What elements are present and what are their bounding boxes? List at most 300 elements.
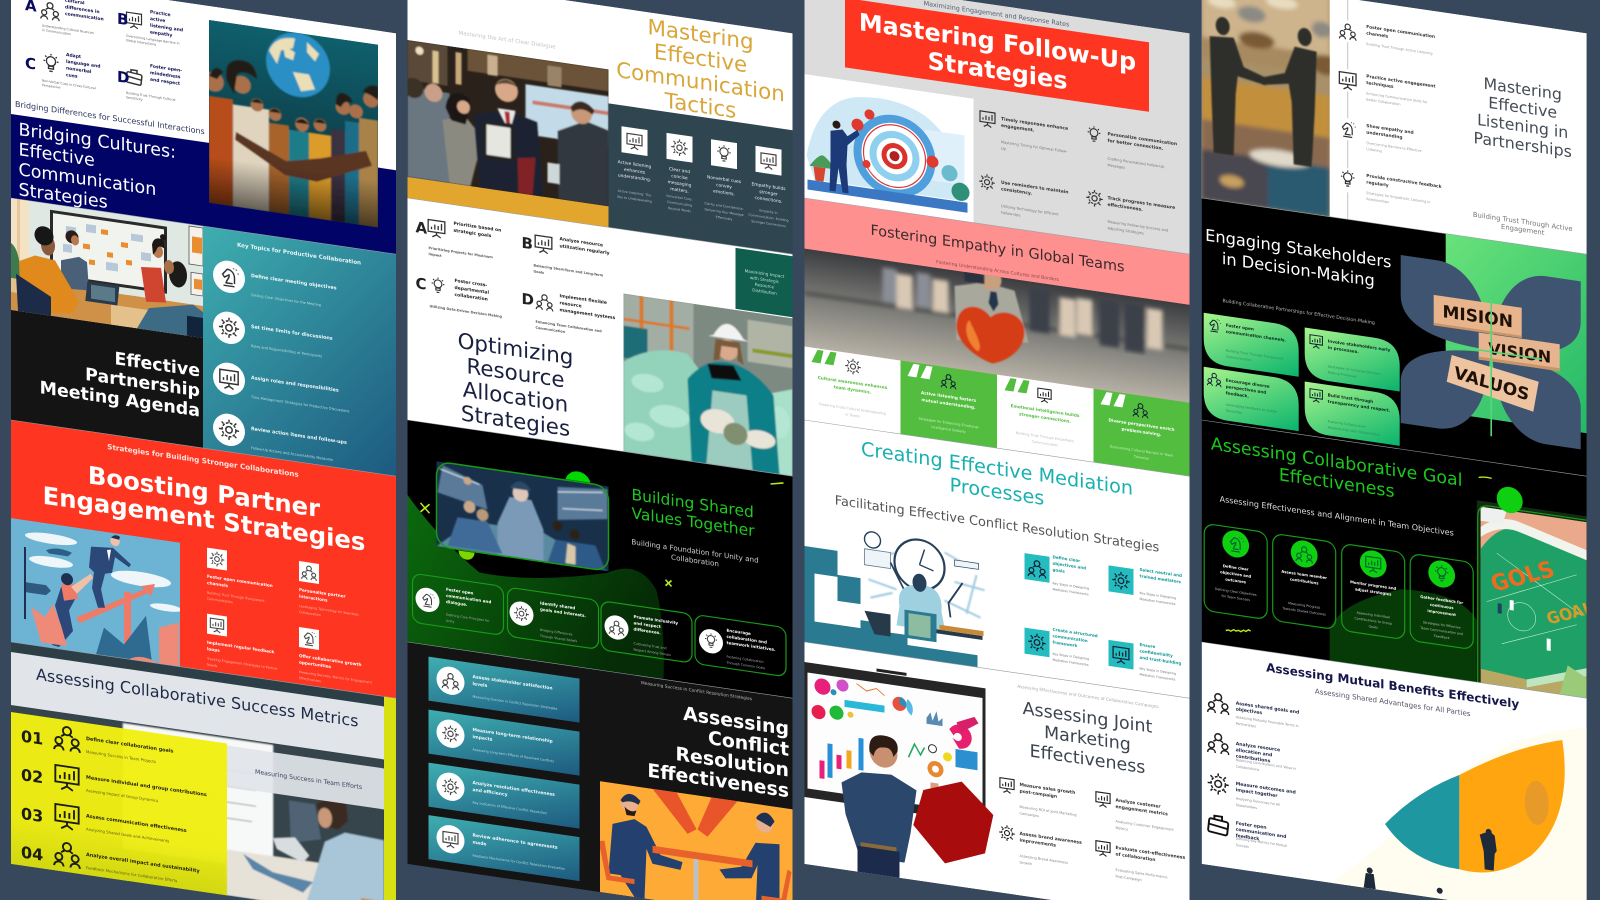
item headings: Track progress to measure [1108, 196, 1175, 211]
card captions: Outcomes [1226, 409, 1243, 415]
card captions: Strategies for Enhancing Emotional [919, 417, 978, 429]
item captions: Global Interactions [126, 38, 156, 47]
tactic captions: Communication: Building [748, 213, 789, 223]
item captions: Communication [536, 326, 566, 334]
panel: key topics [203, 226, 396, 476]
item letters: A [416, 218, 427, 238]
item captions: Mediation Frameworks [1052, 658, 1089, 667]
topic captions: Roles and Responsibilities of Participants [251, 344, 322, 358]
subtitle: Maximizing Engagement and Response Rates [924, 0, 1070, 29]
item headings: collaboration [454, 292, 488, 303]
item captions: Follow-Ups [1001, 211, 1020, 218]
card icons [1207, 318, 1322, 403]
item headings: trained mediators [1139, 573, 1182, 584]
item captions: Measuring ROI of Joint Marketing [1020, 805, 1077, 817]
card headings: dialogue. [446, 599, 468, 607]
item captions [1001, 140, 1168, 239]
card captions: Making Processes [1328, 370, 1357, 379]
tactic captions: Communicating [667, 200, 692, 208]
timeline captions: Enhancing Communication Skills for [1366, 92, 1427, 104]
item headings: contributions [1236, 753, 1271, 764]
slide: effective listening [1202, 0, 1587, 255]
tactic headings: connections. [755, 195, 782, 205]
card headings: Foster open [1226, 323, 1254, 332]
item letters: B [521, 234, 533, 253]
item captions: Messages [1107, 163, 1125, 170]
item captions: Analyzing Customer Engagement [1116, 819, 1174, 832]
step numbers: 04 [21, 843, 43, 865]
title: Boosting Partner [88, 460, 320, 523]
card headings: Cultural awareness enhances [818, 375, 887, 390]
item captions: Balancing Short-Term and Long-Term [534, 263, 603, 278]
item headings: Assess shared goals and [1236, 701, 1299, 716]
title: Partnership [85, 365, 200, 402]
step captions: Feedback Mechanisms for Collaborative Efforts [86, 865, 177, 883]
slide: follow-up strategies [804, 0, 1190, 254]
tactic captions: Active Listening: The [618, 189, 651, 198]
subtitle: Measuring Success in Conflict Resolution Strategies [641, 680, 753, 702]
card icons [845, 358, 1148, 418]
goal captions: Towards Shared Outcomes [1281, 606, 1326, 617]
slide: conflict resolution effectiveness [408, 642, 792, 900]
item headings: departmental [454, 285, 489, 296]
card captions: Cultivating Trust and [634, 642, 667, 650]
item headings: Analyze customer [1116, 798, 1161, 810]
title: Processes [950, 473, 1044, 510]
subtitle: Building Collaborative Partnerships for Effective Decision-Making [1223, 298, 1375, 326]
card headings: and respect [634, 620, 661, 629]
tactic headings: Clear and [669, 167, 690, 175]
timeline captions [1366, 42, 1432, 211]
wooden block: mission: MISION [1442, 302, 1513, 332]
metric headings: Review adherence to agreements [472, 834, 558, 851]
teal stepped blocks [804, 546, 978, 667]
card headings [1226, 323, 1391, 419]
accent: marks [420, 430, 784, 603]
step headings: Measure individual and group contributions [86, 775, 207, 798]
title: Mastering [647, 15, 754, 55]
card captions: Relationships with Stakeholders [1328, 425, 1380, 437]
slide: mediation processes [804, 420, 1190, 698]
tactic captions: Nonverbal Cues: [666, 194, 693, 202]
card headings: stronger connections. [1019, 411, 1071, 424]
slide: collaborative success metrics [11, 642, 396, 900]
timeline captions: Listening [1366, 147, 1382, 153]
item headings: confidentiality [1139, 648, 1173, 658]
metric headings: Analyze resolution effectiveness [472, 781, 555, 798]
title: Resolution [676, 743, 789, 782]
title: Building Shared [632, 486, 754, 522]
title: Bridging Cultures: [18, 120, 176, 163]
red hexagon [913, 775, 993, 870]
title: Assessing [683, 703, 789, 740]
item headings [207, 574, 362, 674]
goal headings [1220, 560, 1463, 618]
card captions [819, 402, 1174, 464]
timeline icons [1337, 19, 1359, 194]
item icon tiles [1024, 553, 1134, 670]
item captions: Metrics [1116, 826, 1128, 832]
item headings: nonverbal [66, 65, 92, 75]
title: Assessing Joint [1023, 699, 1152, 738]
item captions: Collaborations [1236, 764, 1260, 772]
title: Values Together [632, 504, 755, 540]
item headings: language and [66, 59, 100, 70]
title: Engagement Strategies [43, 481, 365, 557]
tactic captions: Delivering Your Message [704, 207, 744, 217]
goal captions: for Team Success [1221, 594, 1250, 602]
card headings [818, 375, 1174, 439]
item headings: framework [1052, 640, 1078, 648]
item captions [1052, 578, 1176, 682]
item captions: Building Trust Through Cultural [126, 91, 175, 102]
step captions [86, 749, 177, 883]
title: Optimizing [458, 329, 573, 371]
card headings: Encourage [726, 628, 751, 636]
card captions: Overcoming Cultural Barriers in Team [1110, 445, 1173, 458]
testimonial cards [804, 346, 1190, 477]
item headings: of collaboration [1116, 851, 1155, 863]
item headings: communication [65, 11, 104, 23]
timeline headings: regularly [1366, 180, 1389, 189]
item icons [207, 548, 319, 650]
silhouettes [1364, 811, 1497, 900]
item captions: Understanding Cultural Nuances [42, 24, 94, 35]
item captions: Non-Verbal Cues in Cross-Cultural [42, 79, 96, 90]
tactic headings: understanding. [618, 172, 651, 183]
title: Effective [1488, 93, 1557, 122]
title: Assessing Mutual Benefits Effectively [1266, 660, 1519, 711]
item headings: feedback [1236, 833, 1260, 842]
step numbers: 02 [21, 765, 43, 787]
goal headings: Assess team member [1281, 569, 1327, 580]
title: Strategies [928, 47, 1067, 95]
tactic captions: Beyond Words [668, 206, 691, 213]
title: Effectiveness [1279, 465, 1395, 502]
item headings: Ensure [1140, 642, 1155, 649]
slide: resource allocation [408, 198, 792, 476]
timeline captions: Building Trust Through Active Listening [1366, 42, 1432, 56]
card headings: Build trust through [1328, 392, 1373, 404]
item headings: engagement. [1001, 123, 1035, 134]
card headings: Active listening fosters [921, 390, 976, 403]
item letters: D [521, 290, 534, 309]
item captions [42, 22, 180, 107]
green backdrop [1446, 234, 1587, 433]
timeline headings: Foster open communication [1366, 25, 1435, 40]
icon: B [126, 12, 142, 29]
subtitle: Assessing Effectiveness and Outcomes of Collaborative Campaigns [1017, 684, 1159, 709]
illustration: target with businessman [804, 74, 974, 222]
step headings [86, 736, 207, 876]
item captions: Overcoming Language Barriers in [126, 34, 180, 46]
goal captions: Strategies for Effective [1423, 620, 1461, 630]
callout text: with Strategic [750, 275, 780, 284]
item icons [979, 110, 1103, 208]
value cards [412, 573, 786, 677]
item captions: Success [1236, 843, 1249, 849]
title: Tactics [664, 89, 736, 124]
subtitle: Building a Foundation for Unity and [631, 537, 759, 565]
icon: A [41, 1, 59, 21]
subtitle: Engagement [1501, 223, 1545, 237]
item captions: Collaboration [299, 610, 321, 617]
tactic captions: Empathy in [759, 208, 778, 215]
metric bars [428, 657, 580, 881]
step numbers [21, 727, 43, 865]
item headings: consistency. [1001, 186, 1032, 197]
goal headings: Define clear [1223, 563, 1249, 572]
item captions: Mediation Frameworks [1139, 597, 1176, 606]
tactic icons [622, 126, 782, 176]
item captions: Sensitivity [126, 95, 143, 102]
item letters: C [25, 54, 36, 74]
item captions: Prioritizing Projects for Maximum [428, 246, 493, 259]
item headings: loops [207, 646, 220, 653]
timeline captions: Overcoming Barriers to Effective [1366, 141, 1422, 153]
item captions: Balancing Contributions and Value in [1236, 758, 1296, 771]
goal icons [1222, 529, 1455, 589]
metric captions: Feedback Mechanisms for Conflict Resolution Evaluation [472, 854, 565, 871]
timeline captions: Strategies for Empathetic Listening in [1366, 191, 1430, 204]
metric headings: and efficiency [472, 787, 508, 798]
panel heading: Key Topics for Productive Collaboration [237, 243, 361, 267]
dark green blob [1330, 578, 1477, 682]
illustration: goals football pitch: GOLS [1487, 556, 1558, 598]
item captions [428, 246, 604, 340]
icon: C [44, 53, 58, 72]
column 2 of slides [404, 0, 792, 900]
band: subtitle [226, 745, 384, 809]
step icons [54, 725, 80, 869]
item letters [416, 218, 534, 309]
wooden block: mission [1434, 295, 1522, 338]
item headings: mindedness [150, 70, 181, 80]
item captions: Building Trust Through Transparent [207, 591, 264, 603]
photo: man working at laptop [11, 705, 384, 900]
tactic headings: Nonverbal cues [707, 175, 741, 185]
item captions: Evaluating Sales Performance [1116, 868, 1168, 879]
goal captions: Defining Clear Objectives [1215, 587, 1257, 597]
tactic headings: matters. [670, 186, 689, 195]
title: Communication [18, 160, 156, 200]
topic headings: Review action items and follow-ups [251, 426, 347, 446]
illustration: climbing an arrow [11, 518, 180, 666]
item captions: Measuring Success: Metrics for Engagement [299, 670, 372, 685]
card headings: goals and interests. [540, 607, 586, 618]
title: Communication [616, 58, 785, 107]
item headings: management systems [560, 307, 615, 321]
item captions: Effectiveness [299, 676, 321, 683]
topic captions: Follow-Up Actions and Accountability Measures [251, 446, 333, 462]
title banner [845, 0, 1149, 112]
topic captions: Time Management Strategies for Productive Discussions [250, 395, 349, 413]
item captions: Perspective [42, 83, 60, 90]
tactic captions [617, 187, 789, 230]
metric captions: Measuring Success in Conflict Resolution Strategies [472, 695, 558, 711]
item headings: communication and [1236, 827, 1286, 840]
card headings: feedback. [1226, 390, 1249, 399]
item captions: Campaigns [1019, 811, 1039, 818]
item headings: Define clear [1052, 554, 1080, 563]
slide: engaging stakeholders [1202, 198, 1587, 476]
cross lines [1446, 294, 1542, 444]
metric headings: levels [472, 681, 488, 689]
card captions: Fostering Cross-Cultural Understanding [819, 402, 886, 416]
item captions [1020, 805, 1174, 887]
tactic captions: Clarity and Conciseness: [704, 201, 744, 211]
title: Effectiveness [1030, 742, 1145, 778]
title: Resource [466, 354, 565, 393]
topic headings: Assign roles and responsibilities [251, 375, 339, 394]
photo: futuristic meeting [436, 461, 608, 572]
goal headings: contributions [1290, 576, 1319, 586]
item captions: Analyzing Outcomes for All [1236, 796, 1280, 807]
card captions: Fostering Collaboration [726, 655, 764, 664]
panel: tactics [608, 103, 792, 255]
item captions: Key Steps in Designing [1052, 581, 1089, 591]
metric captions: Assessing Long-term Effects of Resolved Conflicts [472, 748, 554, 763]
subtitle: Collaboration [671, 553, 719, 568]
item headings: Adapt [66, 53, 81, 60]
step captions: Assessing Impact of Group Dynamics [86, 788, 158, 803]
gold band [408, 176, 608, 228]
column 1 of slides [11, 0, 396, 900]
card icons [416, 586, 723, 655]
subtitle: Assessing Effectiveness and Alignment in Team Objectives [1220, 495, 1454, 538]
slate petals [1401, 255, 1581, 449]
metric headings [472, 674, 558, 858]
title: Meeting Agenda [40, 378, 200, 422]
item letters: B [117, 10, 128, 29]
title: Engaging Stakeholders [1205, 226, 1391, 272]
item headings: Analyze resource [1236, 742, 1280, 753]
card headings: mutual understanding. [921, 397, 976, 410]
tactic headings: enhances [624, 167, 646, 176]
metric headings: made [472, 840, 486, 848]
item captions [1236, 715, 1299, 856]
icon: D [126, 69, 142, 86]
title: Effective [654, 40, 747, 78]
item captions: Impact [428, 252, 442, 258]
card headings: communication and [446, 593, 491, 604]
panel: yellow list [11, 712, 227, 896]
item captions: Stakeholders [1236, 803, 1257, 810]
title: Effective [115, 349, 200, 382]
item headings: active [150, 16, 165, 24]
tactic headings: stronger [759, 189, 778, 198]
card captions: Cohesion [1134, 455, 1149, 461]
item headings: improvements [1019, 837, 1056, 849]
title: Marketing [1044, 723, 1131, 755]
goal headings: objectives and [1220, 569, 1252, 579]
item headings: Foster cross- [454, 279, 487, 289]
topic headings [251, 273, 347, 446]
item captions: Communication [207, 597, 233, 604]
goal captions: Contributions to Group [1354, 616, 1392, 626]
item icons [428, 220, 553, 311]
title: Fostering Empathy in Global Teams [871, 223, 1124, 276]
timeline headings: techniques [1366, 80, 1394, 90]
subtitle: Fostering Understanding Across Cultures and Borders [936, 259, 1059, 283]
goal captions: Team Communication and [1419, 626, 1463, 636]
step captions: Analyzing Shared Goals and Achievements [86, 826, 169, 844]
step numbers: 01 [21, 727, 43, 749]
goal headings: improvement [1427, 608, 1456, 617]
goal headings: Gather feedback for [1420, 594, 1463, 605]
title: Partnerships [1474, 128, 1572, 161]
item captions: Crafting Personalized Follow-Up [1108, 157, 1164, 169]
title: Creating Effective Mediation [861, 437, 1133, 500]
topic icons [213, 258, 245, 448]
wooden block: values [1447, 354, 1539, 413]
item captions: Key Steps in Designing [1052, 652, 1089, 661]
item headings: listening and [150, 23, 183, 34]
title: Assessing Collaborative Success Metrics [36, 665, 359, 731]
item captions: Growth [1019, 860, 1032, 866]
item headings: Foster open- [150, 64, 182, 74]
illustration: clock and desk sketch [814, 523, 986, 656]
column 3 of slides [804, 0, 1190, 900]
title: Strategies [461, 401, 570, 442]
tactic captions: Stronger Connections [751, 219, 786, 228]
card headings: in processes. [1328, 345, 1359, 354]
card captions: Bridging Differences [540, 628, 572, 637]
item headings [1236, 700, 1299, 848]
title: Conflict [708, 727, 789, 761]
card captions: Respect Among Groups [634, 648, 671, 657]
illustration: screen with charts [804, 658, 986, 823]
item captions: Adjusting Strategies [1107, 226, 1144, 236]
item captions: Enhancing Team Collaboration and [536, 320, 602, 333]
goal captions: Goals [1369, 624, 1378, 630]
item headings: Assess brand awareness [1020, 832, 1082, 846]
wooden block: values: VALUOS [1453, 363, 1531, 405]
item captions: in Communication [42, 28, 71, 36]
item headings: Foster open [1236, 821, 1266, 831]
card headings [446, 587, 776, 652]
item letters: D [117, 68, 129, 87]
timeline headings: Show empathy and [1366, 124, 1414, 136]
man pointing at screen [842, 729, 938, 884]
photo: award ceremony [408, 40, 608, 206]
subtitle: Measuring Success in Team Efforts [255, 769, 362, 791]
card captions: Communication [1032, 440, 1058, 448]
title: Effectiveness [647, 760, 789, 802]
card headings: Promote inclusivity [634, 614, 678, 626]
title: Assessing Collaborative Goal [1211, 434, 1463, 491]
item headings: goals [1052, 567, 1065, 574]
slide: fostering empathy [804, 198, 1190, 476]
leaf cards [1204, 313, 1400, 446]
illustration: negotiation at table [600, 781, 792, 900]
item captions: Mediation Frameworks [1052, 587, 1089, 597]
item headings: differences in [65, 4, 100, 15]
card headings: collaboration and [726, 634, 767, 645]
item headings: Prioritize based on [454, 222, 501, 234]
green glow blob [408, 495, 664, 679]
item headings: opportunities [299, 660, 332, 669]
title: Strategies [18, 180, 108, 213]
topic captions: Setting Clear Objectives for the Meeting [251, 293, 321, 307]
item captions: Mediation Frameworks [1139, 672, 1176, 682]
item headings: impact together [1236, 787, 1278, 799]
card captions: Intelligence Globally [931, 425, 966, 434]
goal headings: Monitor progress and [1350, 579, 1396, 591]
photo: people shaking hands under a globe [209, 20, 378, 228]
card captions: Strategies for Inclusive Decision- [1328, 364, 1382, 376]
title: Mastering [1484, 74, 1562, 104]
